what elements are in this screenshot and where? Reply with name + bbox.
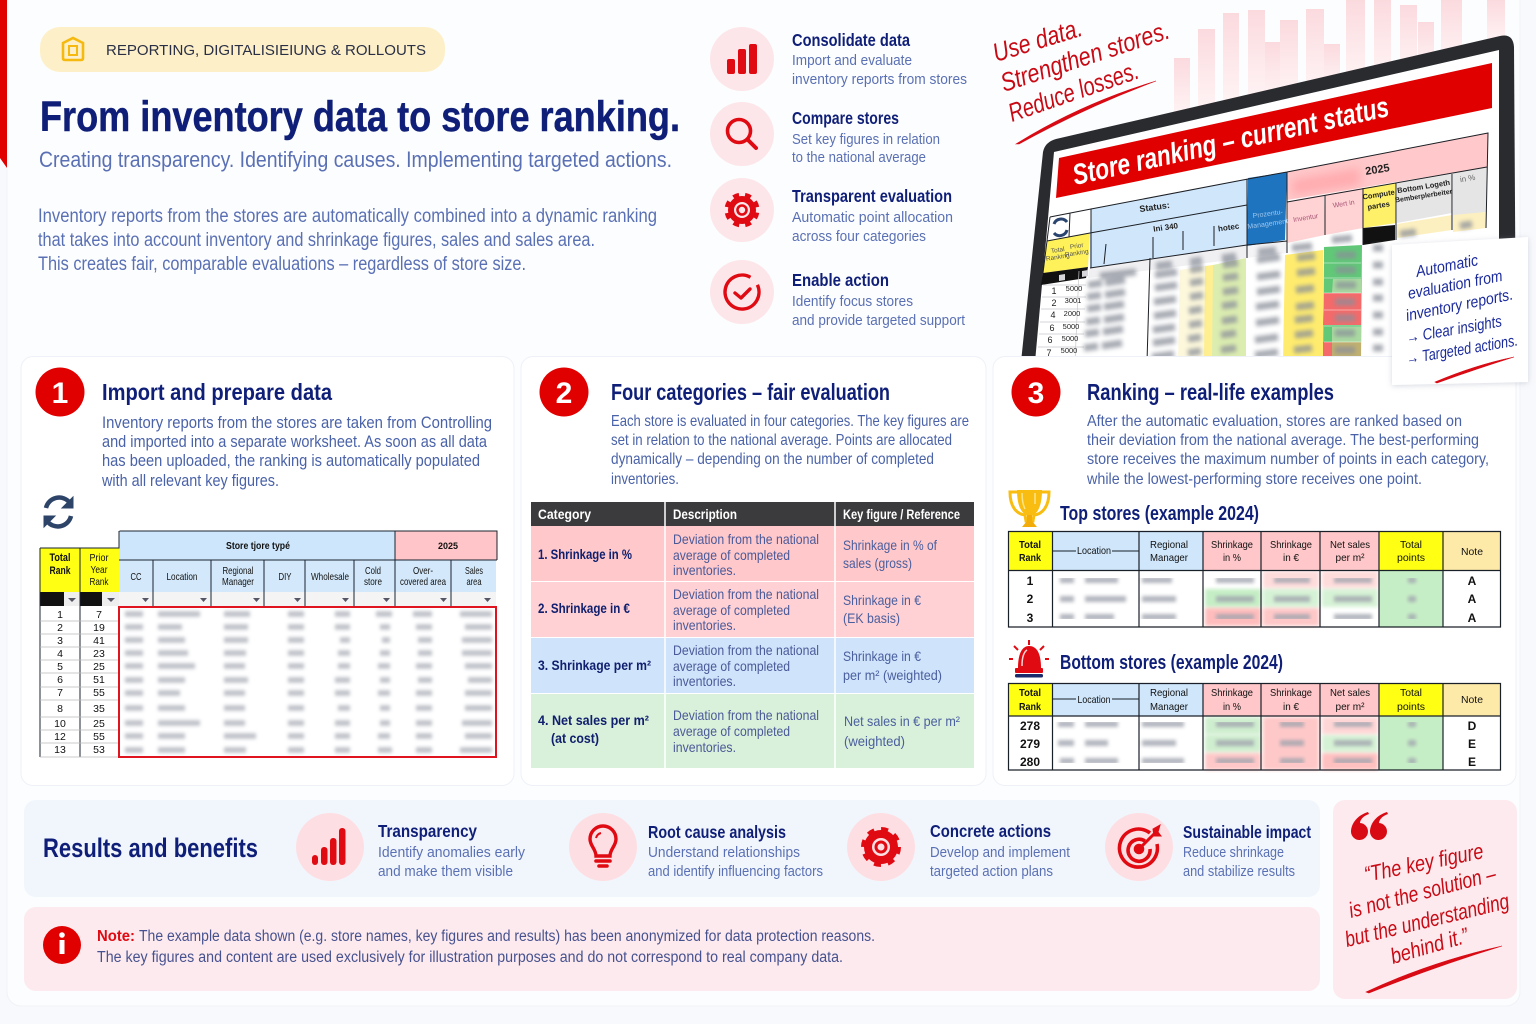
benefit: transparency: Identify anomalies early [378, 844, 525, 861]
benefit: root cause analysis: and identify influencing factors [648, 863, 823, 880]
table: categories: Shrinkage in % of [843, 537, 937, 553]
spreadsheet: Prozentu- [1252, 209, 1284, 220]
description: store receives the maximum number of points in each category, [1087, 451, 1489, 468]
table: categories: average of completed [673, 723, 790, 739]
table: store ranking sheet: covered area [400, 576, 446, 588]
benefit: sustainable impact: Reduce shrinkage [1183, 844, 1284, 861]
note text: The example data shown (e.g. store names, key figures and results) has been anonymized for data protection reasons. [139, 928, 875, 945]
table: categories: average of completed [673, 658, 790, 674]
table: top stores: in % [1223, 552, 1241, 564]
table: categories: average of completed [673, 602, 790, 618]
description [1086, 413, 1489, 488]
icon: rising bars [312, 828, 346, 865]
table: store ranking sheet: area [466, 576, 482, 588]
table: bottom stores: 278 [1020, 719, 1040, 733]
table: top stores: per m² [1336, 552, 1365, 564]
description: Each store is evaluated in four categories. The key figures are [611, 413, 969, 430]
table: store ranking sheet: 19 [93, 622, 105, 634]
table: top stores: Total [1019, 539, 1041, 551]
spreadsheet: hotec [1217, 222, 1240, 233]
panel: results and benefits [24, 800, 1320, 897]
description: has been uploaded, the ranking is automatically populated [102, 452, 480, 470]
table: categories: Description [673, 507, 737, 522]
underline [1016, 81, 1156, 144]
table: store ranking sheet: Total [50, 552, 70, 564]
sticky note [1392, 237, 1528, 385]
table: bottom stores: 280 [1020, 755, 1040, 769]
table: top stores: Net sales [1330, 539, 1370, 551]
icon: sync [44, 497, 73, 527]
panel: step 1 [21, 356, 514, 786]
table: bottom stores: Net sales [1330, 687, 1370, 699]
spreadsheet: 6 [1049, 323, 1055, 333]
table: store ranking sheet: 55 [93, 731, 105, 743]
table: store ranking sheet: 53 [93, 744, 105, 756]
table: store ranking sheet: DIY [278, 571, 292, 583]
blurred store data [125, 614, 492, 750]
spreadsheet: 5000 [1061, 346, 1077, 355]
spreadsheet: 4 [1050, 310, 1056, 320]
table: store ranking sheet: 51 [93, 674, 105, 686]
benefit: concrete actions: Develop and implement [930, 844, 1071, 861]
underline [1435, 357, 1514, 383]
spreadsheet: Wert in [1332, 199, 1355, 210]
quote text [1342, 838, 1512, 969]
red highlight box [119, 607, 496, 757]
red corner accent [0, 0, 7, 168]
feature: transparent evaluation: across four categories [792, 228, 926, 245]
table: store ranking sheet: CC [130, 571, 142, 583]
spreadsheet: 6 [1047, 335, 1053, 345]
sticky note: inventory reports. [1404, 287, 1515, 325]
sticky note: evaluation from [1407, 268, 1504, 303]
table: bottom stores: in € [1283, 701, 1299, 713]
icon: target [1119, 825, 1161, 867]
feature: enable action [710, 260, 966, 329]
table: store ranking sheet: 5 [57, 661, 63, 673]
benefit: concrete actions: Concrete actions [930, 821, 1051, 841]
table: bottom stores: Shrinkage [1211, 687, 1253, 699]
table: bottom stores: Shrinkage [1270, 687, 1312, 699]
table: bottom stores: Total [1400, 687, 1422, 699]
intro text: This creates fair, comparable evaluations – regardless of store size. [38, 254, 526, 275]
icon: light bulb [590, 826, 616, 866]
table: categories: 4. Net sales per m² [538, 712, 649, 728]
description: set in relation to the national average. Points are allocated [611, 432, 952, 449]
table: categories: per m² (weighted) [843, 667, 942, 683]
number badge 3: 3 [1028, 377, 1044, 410]
spreadsheet: Total [1050, 246, 1066, 255]
table: categories: Deviation from the national [673, 586, 819, 602]
table: bottom stores: D [1468, 719, 1477, 733]
icon: info [43, 926, 81, 964]
table: bottom stores: Note [1461, 694, 1483, 706]
icon: gear [865, 831, 897, 863]
icon: quotation mark [1351, 812, 1388, 840]
handwritten slogan: Use data. [989, 12, 1086, 68]
panel: note [24, 907, 1320, 991]
table: categories [531, 502, 974, 768]
description: Inventory reports from the stores are taken from Controlling [102, 414, 492, 432]
table: store ranking sheet: 12 [54, 731, 66, 743]
table: top stores: A [1468, 592, 1477, 606]
table: store ranking sheet: 4 [57, 648, 63, 660]
heading: Four categories – fair evaluation [611, 379, 890, 405]
feature: compare stores [710, 102, 940, 166]
category badge: REPORTING, DIGITALISIEIUNG & ROLLOUTS [106, 42, 426, 59]
subtitle: Creating transparency. Identifying causes. Implementing targeted actions. [39, 147, 672, 172]
table: store ranking sheet: 35 [93, 703, 105, 715]
table: store ranking sheet: 25 [93, 661, 105, 673]
feature: consolidate data: Import and evaluate [792, 52, 912, 69]
panel: quote [1333, 800, 1517, 999]
table: top stores: A [1468, 574, 1477, 588]
table: store ranking sheet: 55 [93, 687, 105, 699]
feature: compare stores: Set key figures in relation [792, 131, 940, 148]
table: categories: Deviation from the national [673, 531, 819, 547]
benefit: sustainable impact: Sustainable impact [1183, 822, 1311, 842]
spreadsheet: 2025 [1365, 162, 1391, 178]
sticky note: → Clear insights [1405, 313, 1503, 347]
icon: alarm light [1009, 640, 1049, 678]
description [101, 414, 492, 490]
quote text: is not the solution – [1346, 861, 1499, 923]
feature: enable action: Identify focus stores [792, 293, 913, 310]
table: store ranking sheet: Cold [365, 565, 381, 577]
table: store ranking sheet: 2 [57, 622, 63, 634]
number badge 3 [1012, 368, 1060, 416]
handwritten slogan: Strengthen stores. [997, 15, 1173, 98]
table: store ranking sheet: Rank [90, 576, 109, 588]
benefit: root cause analysis: Root cause analysis [648, 822, 786, 842]
icon: check circle [725, 275, 759, 309]
benefit: concrete actions: targeted action plans [930, 863, 1053, 880]
table: top stores: Note [1461, 546, 1483, 558]
table: store ranking sheet: Sales [465, 565, 483, 577]
heading: Import and prepare data [102, 379, 332, 405]
category badge [40, 27, 445, 72]
banner: Store ranking – current status [1070, 91, 1392, 192]
table: store ranking sheet: 10 [54, 718, 66, 730]
table: categories: Key figure / Reference [843, 507, 960, 522]
table: bottom stores: E [1468, 755, 1476, 769]
spreadsheet: partes [1367, 199, 1390, 212]
spreadsheet: in % [1459, 173, 1476, 184]
icon: store [63, 38, 83, 60]
table: categories: average of completed [673, 547, 790, 563]
quote text: “The key figure [1362, 838, 1486, 887]
table: categories: 1. Shrinkage in % [538, 546, 632, 562]
feature: transparent evaluation [710, 178, 953, 245]
table: store ranking sheet: 1 [57, 609, 63, 621]
table: categories: 3. Shrinkage per m² [538, 657, 651, 673]
table: top stores: Manager [1150, 552, 1188, 564]
intro text: that takes into account inventory and shrinkage figures, sales and sales area. [38, 230, 595, 251]
table: top stores [1008, 531, 1501, 627]
table: categories: Shrinkage in € [843, 592, 921, 608]
description: dynamically – depending on the number of completed [611, 451, 934, 468]
spreadsheet: 5000 [1066, 284, 1082, 293]
heading: Ranking – real-life examples [1087, 379, 1334, 405]
table: store ranking sheet: Regional [222, 565, 254, 577]
table: store ranking sheet: store [364, 576, 382, 588]
spreadsheet [1038, 133, 1488, 362]
spreadsheet: Prior [1069, 242, 1085, 251]
heading: Results and benefits [43, 833, 258, 863]
table: bottom stores: 279 [1020, 737, 1040, 751]
benefit: transparency: Transparency [378, 821, 477, 841]
benefit: root cause analysis: Understand relationships [648, 844, 800, 861]
table: bottom stores: per m² [1336, 701, 1365, 713]
table: bottom stores: Rank [1019, 701, 1041, 713]
handwritten slogan [989, 12, 1173, 144]
feature: enable action: Enable action [792, 270, 889, 290]
laptop with store ranking [1021, 35, 1516, 362]
table: top stores: A [1468, 611, 1477, 625]
table: top stores: 2 [1027, 592, 1034, 606]
table: top stores: 3 [1027, 611, 1034, 625]
table: store ranking sheet: Wholesale [311, 571, 349, 583]
number badge 1 [36, 368, 84, 416]
table: categories: (EK basis) [843, 610, 900, 626]
table: store ranking sheet: 23 [93, 648, 105, 660]
description: while the lowest-performing store receives one point. [1086, 471, 1422, 488]
spreadsheet: 3001 [1065, 296, 1081, 305]
spreadsheet: 2 [1051, 298, 1057, 308]
spreadsheet: Status: [1139, 200, 1170, 214]
feature: consolidate data: Consolidate data [792, 30, 910, 50]
panel: step 3 [993, 356, 1516, 786]
spreadsheet: 1 [1051, 286, 1057, 296]
spreadsheet: 5000 [1062, 334, 1078, 343]
table: top stores: Shrinkage [1211, 539, 1253, 551]
table: store ranking sheet: Prior [90, 552, 109, 564]
table: categories: Shrinkage in € [843, 648, 921, 664]
icon: trophy [1010, 490, 1049, 527]
sticky note: Automatic [1414, 252, 1480, 281]
table: categories: inventories. [673, 739, 736, 755]
quote text: behind it.” [1387, 922, 1473, 969]
benefit: transparency [296, 813, 525, 881]
table: top stores: in € [1283, 552, 1299, 564]
table: categories: Net sales in € per m² [844, 713, 960, 729]
table: store ranking sheet: 6 [57, 674, 63, 686]
table: store ranking sheet: 3 [57, 635, 63, 647]
icon: sync in sheet [1054, 219, 1067, 236]
table: bottom stores: Location [1078, 694, 1111, 706]
heading: bottom stores: Bottom stores (example 2024) [1060, 652, 1283, 674]
table: store ranking sheet: Over- [413, 565, 433, 577]
heading: top stores: Top stores (example 2024) [1060, 503, 1259, 525]
table: bottom stores: in % [1223, 701, 1241, 713]
table: categories: Category [538, 507, 591, 522]
table: store ranking sheet: 41 [93, 635, 105, 647]
table: bottom stores: Manager [1150, 701, 1188, 713]
spreadsheet: Bottom Logeth [1397, 178, 1451, 195]
table: top stores: Total [1400, 539, 1422, 551]
spreadsheet: Inventur [1293, 213, 1319, 224]
table: top stores: points [1397, 552, 1425, 564]
spreadsheet: Bemberplerbeiter [1395, 188, 1453, 205]
benefit: root cause analysis [569, 813, 823, 881]
feature: enable action: and provide targeted support [792, 312, 966, 329]
description [611, 413, 969, 488]
table: store ranking sheet: 8 [57, 703, 63, 715]
table: bottom stores: Regional [1150, 687, 1188, 699]
number badge 2 [540, 368, 588, 416]
table: store ranking sheet: 25 [93, 718, 105, 730]
table: categories: (weighted) [844, 733, 905, 749]
intro text: Inventory reports from the stores are automatically combined into a dynamic ranking [38, 206, 657, 227]
table: top stores: Regional [1150, 539, 1188, 551]
panel: step 2 [521, 356, 986, 786]
benefit: concrete actions [847, 813, 1071, 881]
description: inventories. [611, 471, 679, 488]
note text: Note: [97, 928, 135, 945]
note text [97, 928, 875, 966]
description: and imported into a separate worksheet. As soon as all data [102, 433, 488, 451]
table: top stores: Shrinkage [1270, 539, 1312, 551]
table: bottom stores: E [1468, 737, 1476, 751]
icon: magnifier [728, 120, 756, 148]
table: bottom stores [1008, 683, 1501, 770]
description: with all relevant key figures. [101, 472, 279, 490]
handwritten slogan: Reduce losses. [1004, 55, 1143, 128]
benefit: sustainable impact: and stabilize results [1183, 863, 1295, 880]
table: bottom stores: points [1397, 701, 1425, 713]
background bar chart [1174, 0, 1505, 118]
table: categories: Deviation from the national [673, 707, 819, 723]
intro text [38, 206, 657, 275]
spreadsheet: 7 [1046, 348, 1052, 358]
table: categories: 2. Shrinkage in € [538, 600, 630, 616]
table: store ranking sheet: Manager [222, 576, 254, 588]
table: bottom stores: Total [1019, 687, 1041, 699]
table: store ranking sheet: Store tjore typé [226, 541, 290, 552]
spreadsheet: Management [1247, 218, 1289, 231]
spreadsheet: Ini 340 [1153, 221, 1179, 234]
spreadsheet: Ranking [1064, 248, 1089, 259]
spreadsheet: 5000 [1063, 322, 1079, 331]
table: categories: inventories. [673, 617, 736, 633]
table: store ranking sheet: 2025 [438, 541, 458, 551]
spreadsheet: 2000 [1064, 309, 1080, 318]
table: store ranking sheet: 13 [54, 744, 66, 756]
benefit: sustainable impact [1105, 813, 1311, 881]
table: store ranking sheet: 7 [57, 687, 63, 699]
feature: compare stores: to the national average [792, 149, 926, 166]
number badge 2: 2 [556, 377, 572, 410]
table: store ranking sheet: Rank [50, 565, 71, 577]
spreadsheet: Ranking [1045, 252, 1070, 263]
title: From inventory data to store ranking. [40, 93, 680, 141]
feature: transparent evaluation: Transparent evaluation [792, 186, 952, 206]
table: store ranking sheet [40, 531, 497, 757]
icon: gear [727, 195, 757, 225]
feature: transparent evaluation: Automatic point allocation [792, 209, 953, 226]
feature: compare stores: Compare stores [792, 108, 899, 128]
spreadsheet: Compute [1362, 188, 1395, 202]
underline [1366, 946, 1502, 993]
feature: consolidate data [710, 27, 967, 91]
description: After the automatic evaluation, stores are ranked based on [1087, 413, 1462, 430]
description: their deviation from the national average. The best-performing [1087, 432, 1479, 449]
table: store ranking sheet: Location [166, 571, 198, 583]
table: categories: inventories. [673, 673, 736, 689]
table: store ranking sheet: 7 [96, 609, 102, 621]
table: categories: inventories. [673, 562, 736, 578]
blurred sheet values [1084, 224, 1472, 357]
note text: The key figures and content are used exclusively for illustration purposes and do not correspond to real company data. [97, 949, 843, 966]
table: top stores: 1 [1027, 574, 1034, 588]
table: top stores: Rank [1019, 552, 1041, 564]
feature: consolidate data: inventory reports from stores [792, 71, 967, 88]
icon: bar chart [727, 44, 757, 74]
table: categories: Deviation from the national [673, 642, 819, 658]
table: store ranking sheet: Year [90, 564, 108, 576]
number badge 1: 1 [52, 377, 68, 410]
table: categories: (at cost) [551, 730, 599, 746]
table: categories: sales (gross) [843, 555, 912, 571]
benefit: transparency: and make them visible [378, 863, 513, 880]
table: top stores: Location [1077, 545, 1111, 557]
